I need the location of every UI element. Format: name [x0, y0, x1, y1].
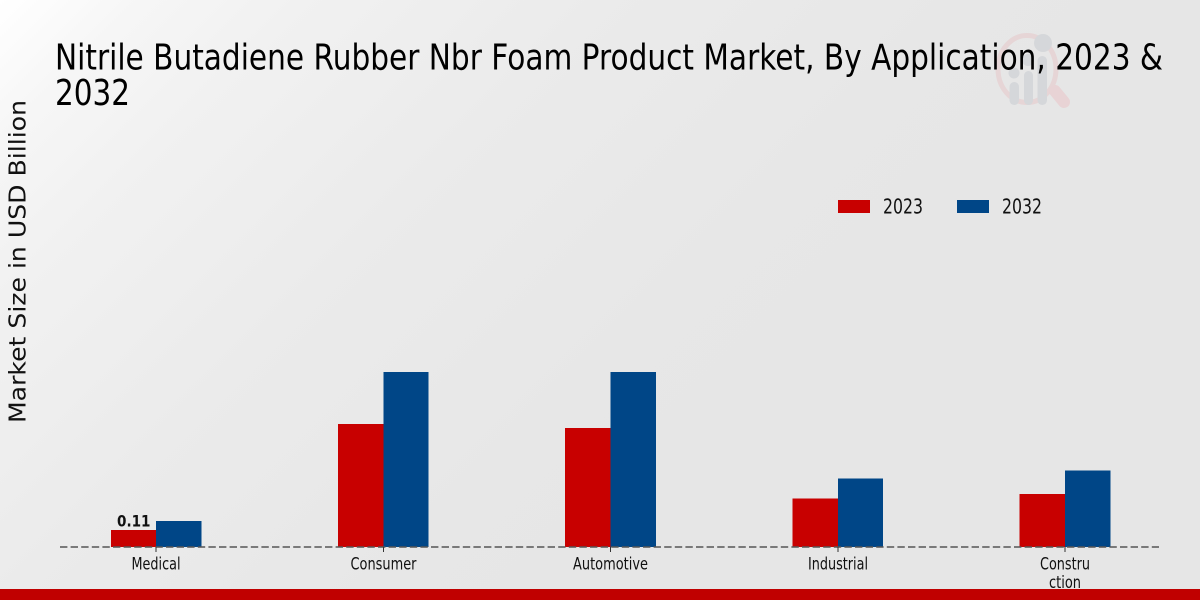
bars: Consumer [338, 372, 428, 547]
legend item: 2023 [838, 194, 923, 218]
bars: Construction [1020, 470, 1110, 547]
y-axis title: Market Size in USD Billion [6, 100, 32, 423]
legend [838, 194, 1042, 218]
category label: Automotive: Automotive [573, 554, 648, 573]
bars: Medical [111, 521, 202, 547]
category label: Construction: Constru [1040, 554, 1090, 573]
title: 2032 [55, 73, 130, 114]
legend item: 2032: 2032 [1002, 194, 1042, 218]
x axis baseline [60, 546, 1159, 548]
category label: Industrial: Industrial [808, 554, 868, 573]
bars: Industrial [792, 478, 883, 547]
category label: Medical: Medical [132, 554, 180, 573]
legend item: 2032 [957, 194, 1042, 218]
watermark logo [998, 34, 1064, 105]
category label: Consumer: Consumer [350, 554, 417, 573]
x axis tick marks [156, 547, 1065, 552]
data label: Medical 2023: 0.11 [117, 512, 150, 531]
legend item: 2023: 2023 [883, 194, 923, 218]
bars: Automotive [565, 372, 656, 547]
bottom red band [0, 589, 1200, 600]
category label: Construction: ction [1049, 573, 1081, 592]
